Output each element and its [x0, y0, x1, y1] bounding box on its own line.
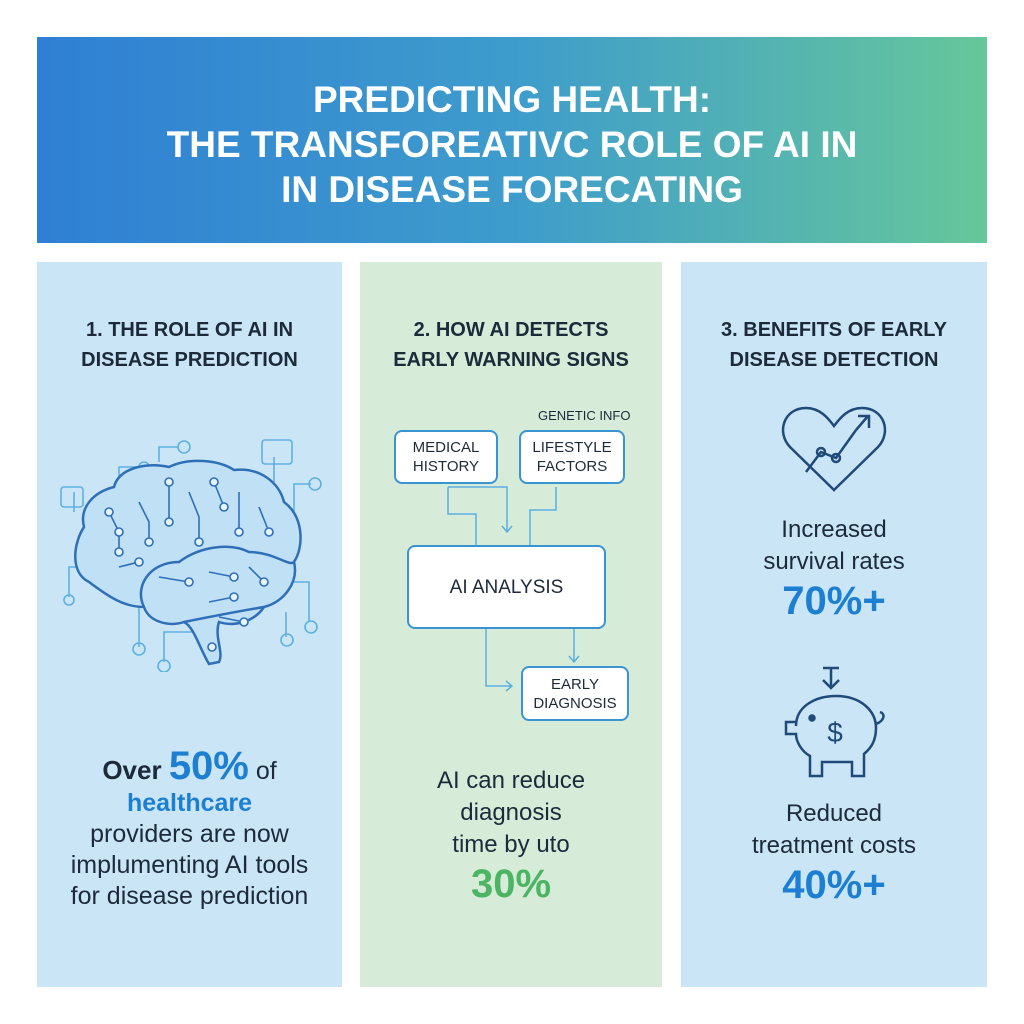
stat treatment costs: [752, 800, 916, 907]
box early diagnosis: [521, 666, 629, 721]
panel: role of AI: [37, 262, 342, 987]
stat survival: Increased: [781, 516, 887, 543]
stat survival: [763, 516, 905, 623]
panel: benefits: [681, 262, 987, 987]
title: THE TRANSFOREATIVC ROLE OF AI IN: [167, 124, 857, 165]
stat survival: survival rates: [763, 548, 905, 575]
stat text 30%: 30%: [471, 862, 551, 906]
stat text 50%: implumenting AI tools: [71, 851, 308, 879]
heading 2: EARLY WARNING SIGNS: [393, 349, 629, 371]
stat text 30%: AI can reduce: [437, 767, 585, 794]
heading 1: DISEASE PREDICTION: [81, 349, 298, 371]
icon: circuit brain: [60, 439, 322, 672]
title: PREDICTING HEALTH:: [313, 79, 711, 120]
heading 1: 1. THE ROLE OF AI IN: [86, 319, 293, 341]
box medical history: MEDICAL: [413, 439, 479, 456]
stat text 50%: for disease prediction: [71, 882, 308, 910]
stat treatment costs: treatment costs: [752, 832, 916, 859]
stat text 50%: [70, 744, 308, 910]
stat text 50%: providers are now: [90, 820, 289, 848]
icon: heart with trend: [782, 406, 886, 492]
box lifestyle factors: FACTORS: [537, 458, 607, 475]
icon: piggy bank: $: [827, 717, 843, 748]
box medical history: HISTORY: [413, 458, 479, 475]
heading 3: 3. BENEFITS OF EARLY: [721, 319, 947, 341]
panel: how AI detects: [360, 262, 662, 987]
box early diagnosis: DIAGNOSIS: [533, 694, 617, 712]
heading 2: [393, 319, 629, 371]
box lifestyle factors: LIFESTYLE: [532, 439, 612, 456]
header banner: [37, 37, 987, 243]
label genetic info: GENETIC INFO: [538, 408, 630, 423]
stat treatment costs: Reduced: [786, 800, 882, 827]
stat survival: 70%+: [782, 579, 886, 623]
stat text 50%: healthcare: [127, 789, 252, 817]
box early diagnosis: EARLY: [551, 676, 599, 692]
title: IN DISEASE FORECATING: [281, 169, 743, 210]
box AI analysis: [407, 545, 606, 629]
icon: piggy bank: [784, 666, 885, 778]
heading 3: [721, 319, 947, 371]
box lifestyle factors: [519, 430, 625, 484]
stat text 30%: time by uto: [452, 831, 570, 858]
heading 1: [81, 319, 298, 371]
heading 2: 2. HOW AI DETECTS: [414, 319, 608, 341]
flowchart arrows: [447, 486, 580, 692]
stat text 30%: [437, 767, 585, 906]
stat treatment costs: 40%+: [782, 863, 886, 907]
title: [167, 79, 857, 210]
box AI analysis: AI ANALYSIS: [450, 576, 563, 598]
box medical history: [394, 430, 498, 484]
stat text 30%: diagnosis: [460, 799, 562, 826]
stat text 50%: Over 50% of: [102, 744, 277, 788]
heading 3: DISEASE DETECTION: [730, 349, 938, 371]
